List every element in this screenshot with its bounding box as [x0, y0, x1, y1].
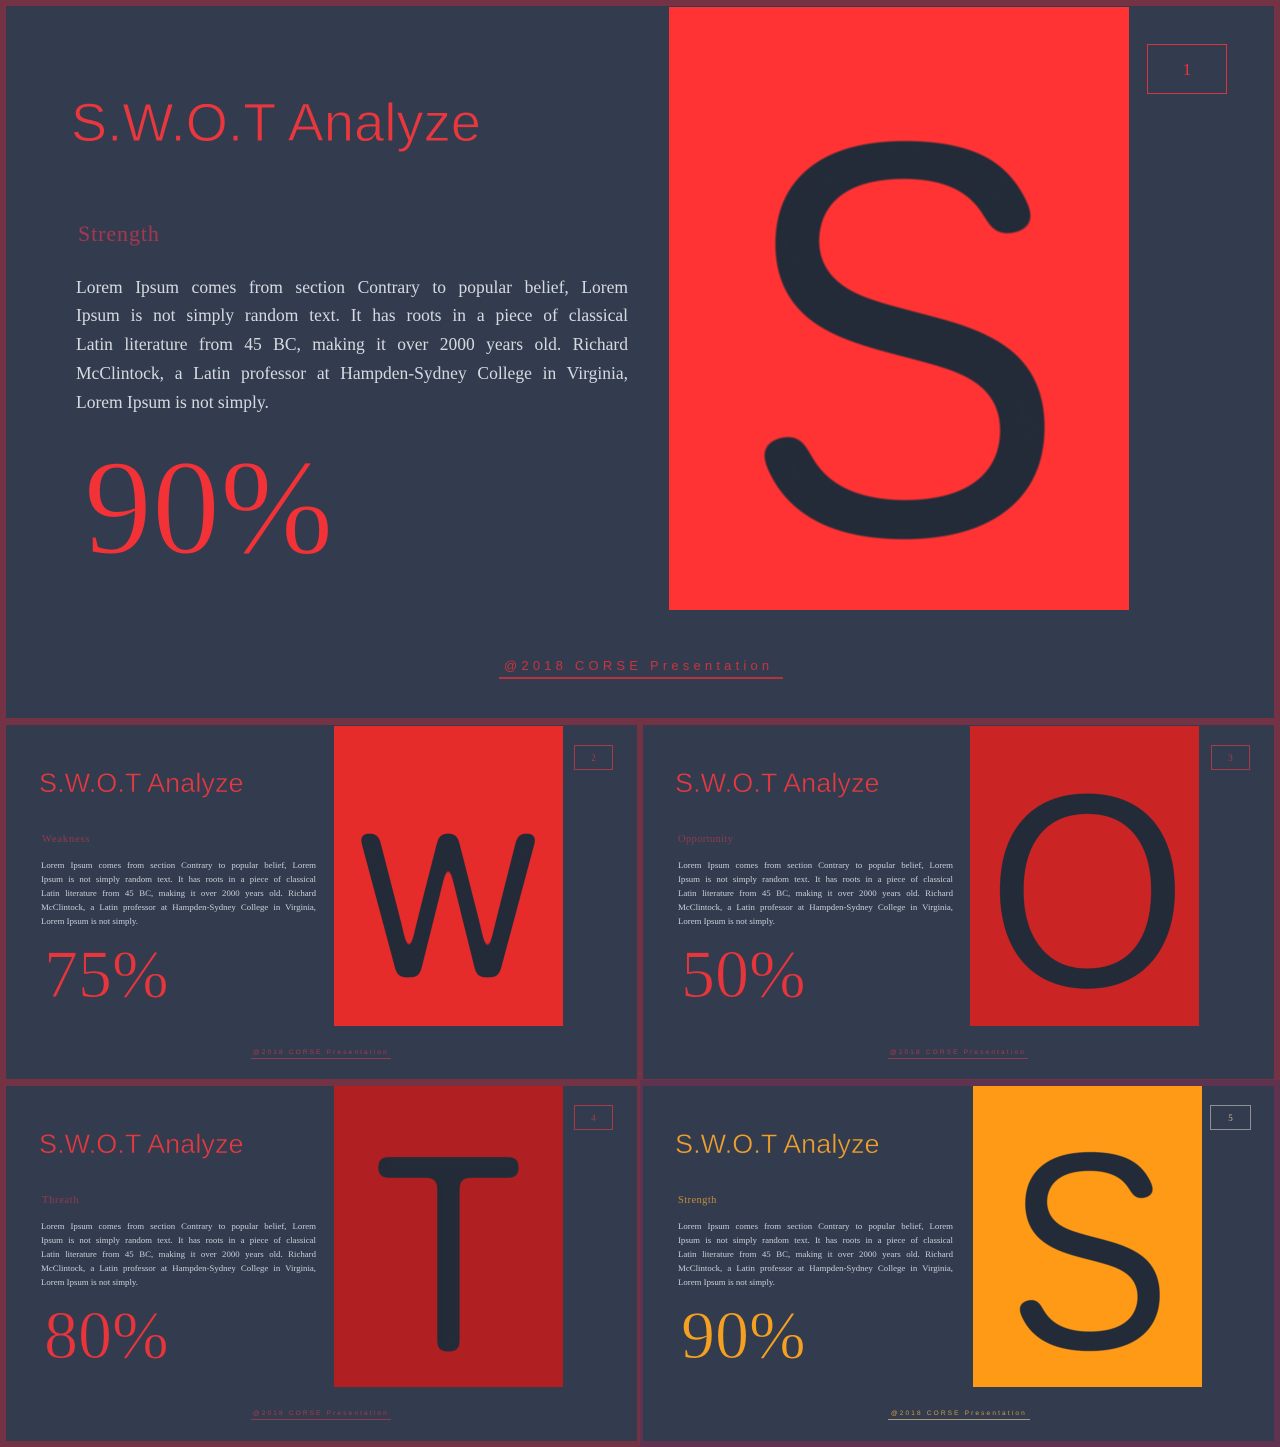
body text: McClintock, a Latin professor at Hampden-Sydney College in Virginia,: [76, 363, 628, 383]
body text: Latin literature from 45 BC, making it over 2000 years old. Richard: [678, 888, 953, 898]
body text: Ipsum is not simply random text. It has roots in a piece of classical: [41, 874, 316, 884]
title: S.W.O.T Analyze: [71, 93, 481, 153]
body text: Lorem Ipsum is not simply.: [41, 916, 138, 926]
letter block: W: [334, 726, 563, 1026]
page number box: 4: [591, 1113, 596, 1123]
percentage: 90%: 90%: [84, 433, 333, 583]
subheading: Opportunity: Opportunity: [678, 834, 733, 845]
letter block: W: W: [359, 790, 538, 1022]
body text: McClintock, a Latin professor at Hampden-Sydney College in Virginia,: [678, 902, 953, 912]
title: S.W.O.T Analyze: [675, 768, 880, 798]
page number box: 2: [591, 753, 596, 763]
body text: Lorem Ipsum comes from section Contrary to popular belief, Lorem: [678, 1221, 953, 1231]
page number box: 3: [1228, 753, 1233, 763]
panel: opportunity slide: [643, 725, 1274, 1079]
footer credit: @2018 CORSE Presentation: [890, 1049, 1026, 1056]
body text: Latin literature from 45 BC, making it over 2000 years old. Richard: [41, 888, 316, 898]
body text: McClintock, a Latin professor at Hampden-Sydney College in Virginia,: [41, 1263, 316, 1273]
letter block: T: [334, 1086, 563, 1387]
subheading: Strength: Strength: [678, 1195, 717, 1206]
body text: Latin literature from 45 BC, making it over 2000 years old. Richard: [678, 1249, 953, 1259]
panel: weakness slide: [6, 725, 637, 1079]
footer credit: @2018 CORSE Presentation: [253, 1049, 389, 1056]
body text: [76, 277, 628, 412]
body text: [41, 1221, 316, 1287]
body text: Lorem Ipsum is not simply.: [678, 916, 775, 926]
body text: Lorem Ipsum is not simply.: [41, 1277, 138, 1287]
title: S.W.O.T Analyze: [39, 768, 244, 798]
title: S.W.O.T Analyze: [675, 1129, 880, 1159]
body text: McClintock, a Latin professor at Hampden-Sydney College in Virginia,: [41, 902, 316, 912]
body text: Ipsum is not simply random text. It has roots in a piece of classical: [678, 874, 953, 884]
percentage: 50%: 50%: [681, 936, 806, 1012]
footer credit: @2018 CORSE Presentation: [253, 1410, 389, 1417]
page number box: 1: [1183, 60, 1191, 79]
panel: main strength slide: [6, 6, 1274, 718]
body text: [41, 860, 316, 926]
body text: [678, 1221, 953, 1287]
subheading: Strength: Strength: [78, 221, 160, 246]
percentage: 90%: 90%: [681, 1297, 806, 1373]
page number box: [574, 1105, 613, 1130]
subheading: Threath: Threath: [42, 1195, 79, 1206]
body text: Ipsum is not simply random text. It has roots in a piece of classical: [678, 1235, 953, 1245]
percentage: 80%: 80%: [44, 1297, 169, 1373]
body text: [678, 860, 953, 926]
footer credit: @2018 CORSE Presentation: [891, 1410, 1027, 1417]
body text: Lorem Ipsum comes from section Contrary to popular belief, Lorem: [76, 277, 628, 297]
footer credit: @2018 CORSE Presentation: [504, 658, 773, 673]
page number box: [574, 745, 613, 770]
panel: orange strength slide: [643, 1086, 1274, 1441]
body text: Ipsum is not simply random text. It has roots in a piece of classical: [76, 305, 628, 325]
percentage: 75%: 75%: [44, 936, 169, 1012]
body text: Latin literature from 45 BC, making it over 2000 years old. Richard: [76, 334, 628, 354]
body text: Lorem Ipsum comes from section Contrary to popular belief, Lorem: [678, 860, 953, 870]
body text: Latin literature from 45 BC, making it over 2000 years old. Richard: [41, 1249, 316, 1259]
body text: Ipsum is not simply random text. It has roots in a piece of classical: [41, 1235, 316, 1245]
body text: McClintock, a Latin professor at Hampden-Sydney College in Virginia,: [678, 1263, 953, 1273]
page number box: [1211, 745, 1250, 770]
page number box: [1147, 44, 1227, 94]
page number box: 5: [1228, 1113, 1233, 1123]
page number box: [1210, 1105, 1251, 1130]
body text: Lorem Ipsum comes from section Contrary to popular belief, Lorem: [41, 1221, 316, 1231]
title: S.W.O.T Analyze: [39, 1129, 244, 1159]
panel: threath slide: [6, 1086, 637, 1441]
subheading: Weakness: Weakness: [42, 834, 90, 845]
body text: Lorem Ipsum comes from section Contrary to popular belief, Lorem: [41, 860, 316, 870]
body text: Lorem Ipsum is not simply.: [76, 392, 269, 412]
body text: Lorem Ipsum is not simply.: [678, 1277, 775, 1287]
